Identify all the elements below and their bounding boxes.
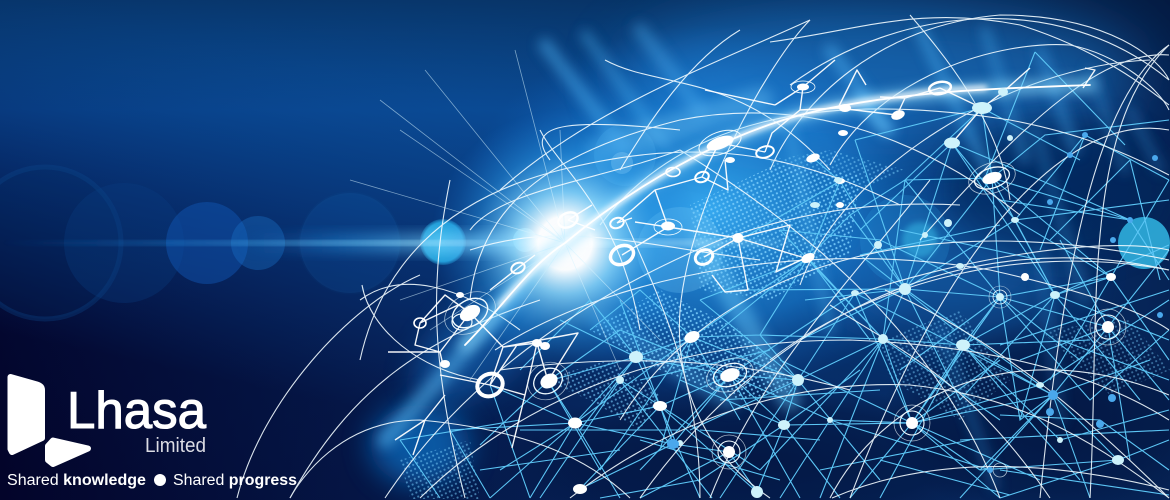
- network nodes: [414, 80, 1163, 498]
- light beams: [385, 30, 1160, 485]
- globe glow: [370, 5, 1170, 500]
- central flare and horizontal light streak: [0, 50, 825, 380]
- circuit links: [388, 60, 1095, 455]
- ring nodes: [414, 80, 952, 400]
- logo mark: [10, 377, 88, 464]
- pale blue nodes: [616, 88, 1124, 498]
- cyan network lines: [400, 52, 1169, 498]
- logo: Lhasa Limited: [7, 377, 297, 489]
- tagline: [7, 472, 297, 489]
- tagline: Shared progress: [173, 472, 297, 489]
- mid blue nodes: [667, 132, 1163, 473]
- white elliptical nodes: [440, 84, 1116, 494]
- tagline: Shared knowledge: [7, 472, 146, 489]
- halo hub nodes: [437, 81, 1126, 477]
- Limited: Limited: [145, 435, 206, 457]
- bright globe horizon: [465, 85, 1090, 345]
- white globe arcs: [237, 15, 1169, 498]
- wordmark: Lhasa: [67, 382, 206, 440]
- lens flare circles: [0, 124, 1170, 319]
- dotted continents: [400, 150, 1170, 499]
